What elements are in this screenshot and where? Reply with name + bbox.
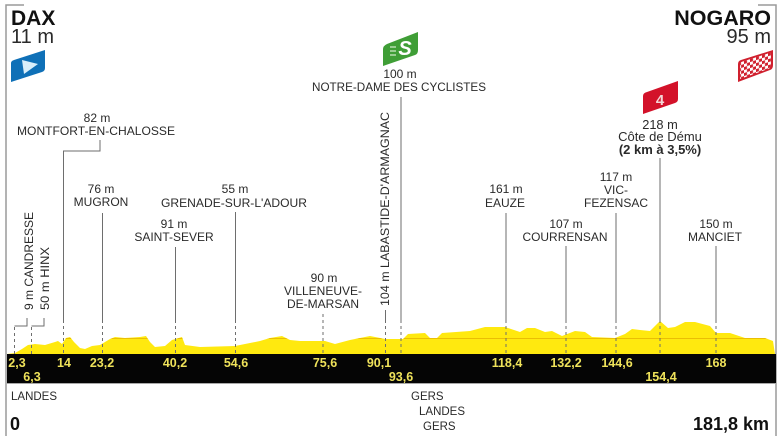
place labels: 161 m xyxy=(489,182,523,196)
place labels: 107 m xyxy=(549,217,583,231)
place labels xyxy=(17,111,743,311)
total distance: 181,8 km xyxy=(693,414,769,434)
place labels: VIC- xyxy=(604,183,628,197)
climb label: (2 km à 3,5%) xyxy=(619,142,701,157)
place labels: EAUZE xyxy=(485,196,525,210)
place labels: 150 m xyxy=(699,217,733,231)
km markers: 54,6 xyxy=(224,356,248,370)
km markers: 168 xyxy=(706,356,726,370)
km markers: 2,3 xyxy=(8,356,26,370)
vertical labels xyxy=(22,112,392,310)
place labels: 90 m xyxy=(311,271,337,285)
sprint label xyxy=(312,67,486,94)
km markers: 154,4 xyxy=(645,370,677,384)
km markers: 23,2 xyxy=(90,356,114,370)
km markers: 6,3 xyxy=(23,370,41,384)
icon: climb flag category 4: 4 xyxy=(656,92,665,109)
finish town: 95 m xyxy=(727,26,771,48)
departments: LANDES xyxy=(11,391,57,403)
finish town: NOGARO xyxy=(674,6,771,30)
place labels: VILLENEUVE- xyxy=(284,284,362,298)
place labels: MONTFORT-EN-CHALOSSE xyxy=(17,124,175,138)
leader lines xyxy=(14,97,716,354)
place labels: 117 m xyxy=(600,170,632,184)
place labels: DE-MARSAN xyxy=(287,297,359,311)
km markers: 40,2 xyxy=(163,356,187,370)
departments: LANDES xyxy=(419,406,465,418)
sprint label: NOTRE-DAME DES CYCLISTES xyxy=(312,80,486,94)
start town xyxy=(11,7,55,48)
place labels: 55 m xyxy=(222,182,248,196)
climb label xyxy=(618,117,702,157)
km markers: 14 xyxy=(57,356,71,370)
place labels: SAINT-SEVER xyxy=(134,230,214,244)
km markers: 90,1 xyxy=(367,356,391,370)
place labels: MANCIET xyxy=(688,230,743,244)
distance band xyxy=(7,354,776,383)
start km: 0 xyxy=(10,414,20,434)
km markers: 118,4 xyxy=(492,356,522,370)
place labels: FEZENSAC xyxy=(584,196,648,210)
start town: DAX xyxy=(11,7,55,30)
vertical labels: 104 m LABASTIDE-D'ARMAGNAC xyxy=(378,112,392,306)
place labels: MUGRON xyxy=(74,195,128,209)
departments xyxy=(11,391,465,433)
place labels: 82 m xyxy=(84,111,110,125)
place labels: GRENADE-SUR-L'ADOUR xyxy=(161,196,307,210)
sprint label: 100 m xyxy=(383,67,417,81)
km markers xyxy=(8,356,726,384)
icon: sprint flag: S xyxy=(398,38,412,60)
km markers: 93,6 xyxy=(389,370,413,384)
km markers: 75,6 xyxy=(313,356,337,370)
start town: 11 m xyxy=(11,26,54,48)
place labels: COURRENSAN xyxy=(522,230,608,244)
climb label: 218 m xyxy=(642,117,678,132)
elevation profile xyxy=(7,321,776,354)
vertical labels: 50 m HINX xyxy=(38,247,52,310)
climb label: Côte de Dému xyxy=(618,129,702,144)
icon: finish flag xyxy=(738,50,773,82)
km markers: 144,6 xyxy=(601,356,633,370)
departments: GERS xyxy=(411,391,444,403)
km markers: 132,2 xyxy=(550,356,582,370)
icon: climb flag category 4 xyxy=(643,81,678,114)
place labels: 76 m xyxy=(88,182,114,196)
icon: sprint flag xyxy=(383,32,418,66)
finish town xyxy=(674,6,771,48)
vertical labels: 9 m CANDRESSE xyxy=(22,212,36,310)
place labels: 91 m xyxy=(161,217,187,231)
icon: start flag xyxy=(11,50,45,82)
departments: GERS xyxy=(423,421,456,433)
